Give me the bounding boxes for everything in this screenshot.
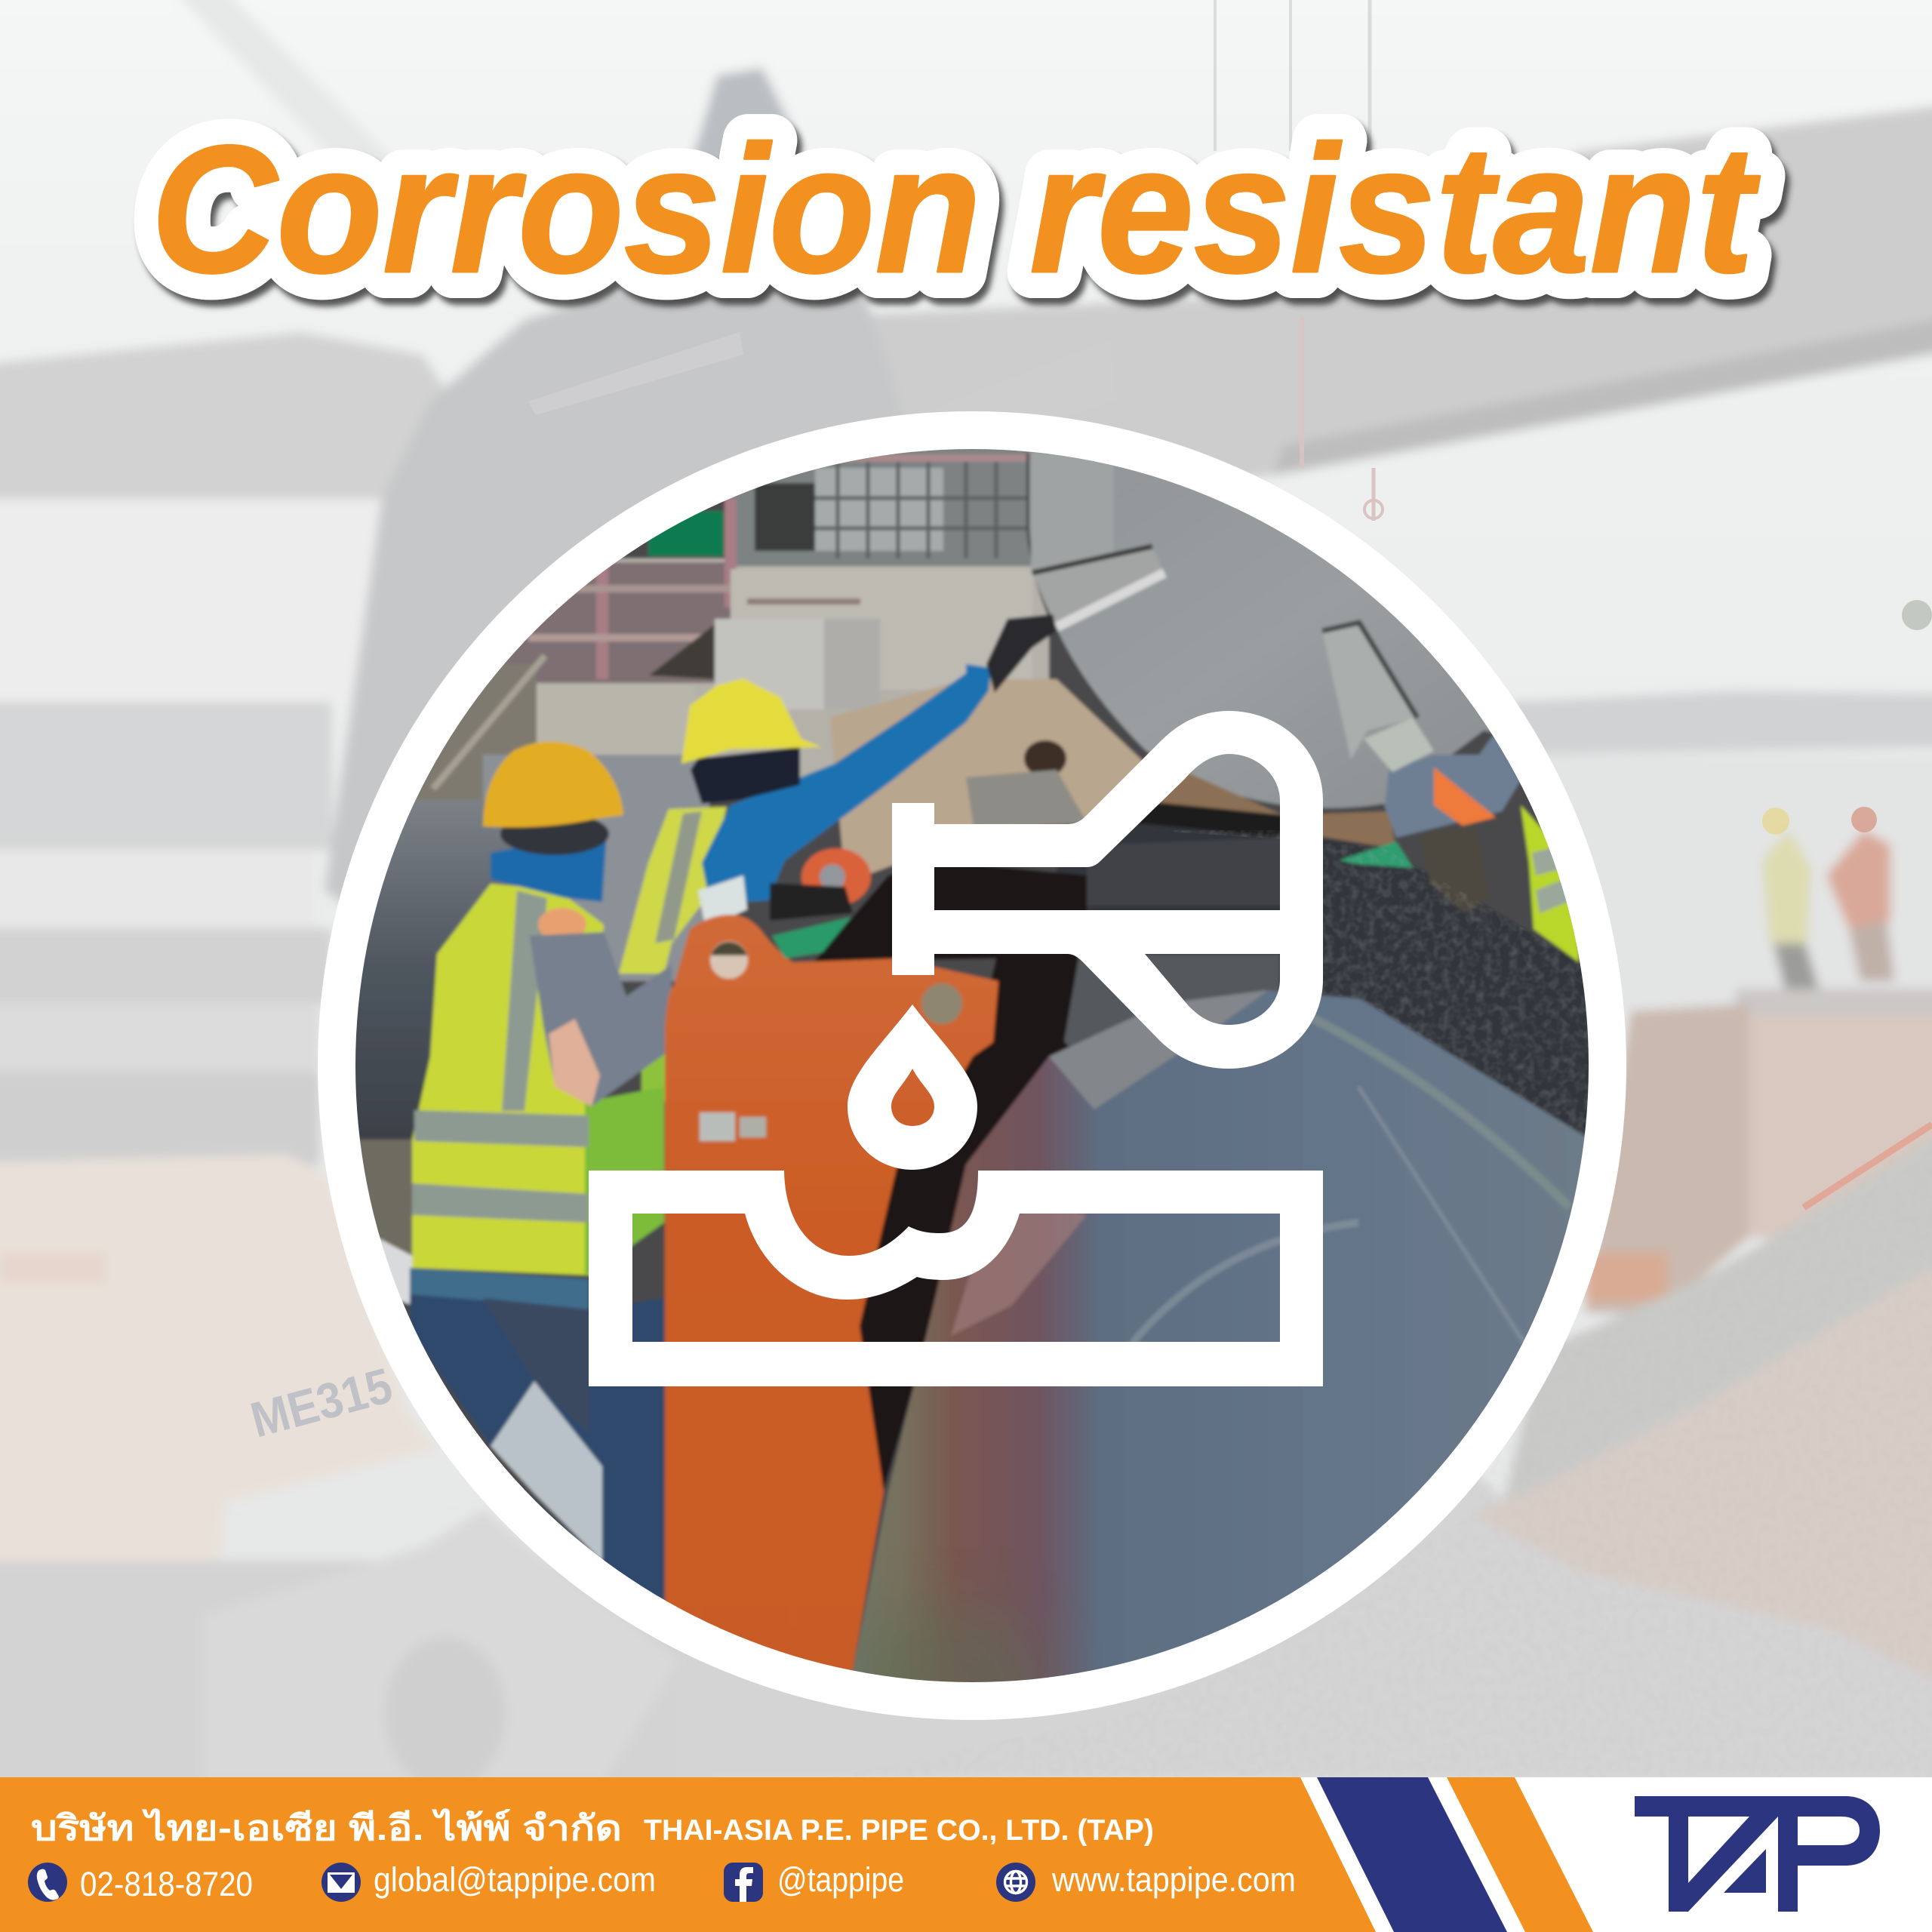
title orange text: Corrosion resistant (151, 108, 1761, 310)
river on right (1509, 755, 1932, 1011)
worker 2 glove (986, 614, 1057, 693)
logo T and P top (1635, 1796, 1880, 1912)
black pipe grain (1148, 830, 1615, 1155)
machinery (1585, 1004, 1749, 1313)
vest stripe lower (412, 1183, 589, 1223)
excavator arm top (679, 68, 800, 196)
worker right orange cuff (1434, 768, 1496, 826)
white bag (491, 1381, 602, 1561)
black pipe band (1132, 800, 1283, 838)
navy stripe (1317, 1777, 1507, 1932)
soil mound (830, 679, 1144, 883)
background wall (536, 555, 1052, 780)
green lower patch (641, 1053, 669, 1102)
background details (528, 0, 1932, 1208)
distant worker yellow (1762, 830, 1811, 943)
debris (1419, 826, 1491, 913)
worker 2 vest stripe (655, 811, 702, 943)
corroded pipe section (589, 1171, 1323, 1386)
plate label small (740, 1117, 766, 1137)
excavator boom (325, 181, 906, 981)
track left edge (204, 1509, 679, 1781)
cream counterweight (0, 1155, 438, 1562)
formwork rail (558, 585, 732, 592)
formwork (475, 562, 732, 683)
gravel texture (830, 1134, 1932, 1777)
formwork rail (528, 634, 724, 641)
silver bar (1057, 573, 1164, 627)
jeans (410, 1294, 664, 1607)
lower left ground (0, 1561, 717, 1787)
small orange ring (801, 848, 871, 906)
black bit (770, 883, 853, 921)
road (483, 755, 709, 981)
worker 1 arm (530, 932, 672, 1106)
gravel road (679, 1434, 1932, 1781)
distant worker red (1826, 830, 1890, 928)
dark strip (649, 623, 717, 679)
formwork post (596, 566, 608, 679)
grey pipe disc (1028, 423, 1592, 810)
plate hole shadow (711, 942, 747, 955)
concrete block (715, 619, 824, 709)
logo A wedge (1724, 1849, 1766, 1893)
icon: facebook (724, 1863, 763, 1902)
worker 1 helmet (483, 741, 623, 827)
phone number: 02-818-8720 (80, 1865, 253, 1903)
worker 1 scarf (491, 830, 607, 902)
orange plate (665, 915, 998, 1690)
bridge centre and right span (800, 102, 1932, 483)
soil dark patch (1024, 740, 1066, 777)
soil grey patch (966, 770, 1087, 826)
title: Corrosion resistant (151, 108, 1761, 310)
platform (1736, 989, 1932, 1015)
footer white base (0, 1777, 1932, 1932)
concrete wall back (731, 569, 1032, 690)
vest stripe vertical (502, 891, 547, 1111)
plate label (700, 1112, 735, 1141)
excavator body (0, 928, 332, 1004)
vest stripe (1532, 845, 1566, 875)
disc rim line (1028, 453, 1384, 810)
ladder rail (433, 656, 545, 789)
excavator band (0, 1004, 320, 1072)
worker 1 vest (412, 884, 604, 1275)
dark opening (755, 483, 815, 551)
vest stripe (1536, 875, 1577, 913)
email address: global@tappipe.com (374, 1860, 656, 1899)
bracket dark line (1032, 546, 1152, 573)
slope grey (1502, 1117, 1932, 1509)
worker right vest (1521, 805, 1579, 962)
footer orange panel (0, 1777, 1376, 1932)
concrete block side (824, 619, 880, 709)
icon: mail (321, 1863, 361, 1902)
distant worker trousers (1774, 943, 1819, 989)
pipe green base (845, 1600, 1041, 1781)
worker right light sleeve (1364, 718, 1434, 772)
worker 2 helmet (681, 678, 822, 764)
scaffold grid (815, 460, 1026, 558)
soil strip right (1132, 755, 1396, 849)
pipe seam (1358, 1087, 1524, 1343)
water drop (848, 1004, 977, 1170)
white cloth (698, 875, 747, 928)
dark pipe left (332, 800, 558, 1147)
faucet (892, 711, 1323, 1069)
white circle ring (318, 411, 1626, 1720)
left water (0, 850, 317, 928)
worker 1 hair (500, 813, 609, 855)
worker 1 skin (549, 1019, 600, 1106)
orange stripe (1447, 1777, 1593, 1932)
icon: globe (996, 1863, 1035, 1902)
grey pipe gap (1064, 954, 1280, 1066)
crane lattice (154, 0, 400, 189)
pipe streak (1132, 1223, 1358, 1343)
bracket wedge (1032, 546, 1164, 627)
second bracket (1322, 623, 1417, 759)
worker 1 shoulder (538, 908, 586, 941)
title white outline: Corrosion resistant (151, 108, 1761, 310)
left bridge (0, 332, 468, 499)
vest stripe upper (414, 1110, 589, 1147)
footer band (0, 1777, 1932, 1932)
left ground lower (332, 1140, 414, 1268)
vest green side (585, 1087, 664, 1275)
track wheel (385, 1638, 506, 1789)
wall rail (747, 598, 860, 605)
left ground (355, 664, 537, 800)
black textured pipe (1057, 817, 1615, 1155)
second bracket edge (1322, 623, 1417, 718)
green panel (648, 511, 724, 556)
scaffold bright (815, 468, 943, 551)
white edge (377, 1238, 414, 1306)
circular photo of workers and pipes (355, 449, 1589, 1682)
low wall (537, 685, 695, 756)
facebook handle: @tappipe (777, 1860, 904, 1899)
machinery base (1585, 1253, 1668, 1302)
formwork pillar (724, 498, 737, 608)
worker 2 vest (619, 807, 727, 974)
excavator lower band (0, 1072, 320, 1166)
plate bolt (921, 983, 962, 1024)
scaffold area (724, 445, 1041, 566)
ring hole (820, 864, 845, 890)
black pipe highlight (1087, 838, 1283, 906)
pale tint (0, 1253, 106, 1283)
bridge lower edge (1274, 313, 1932, 475)
logo diagonal (1688, 1817, 1778, 1912)
left river view (0, 499, 385, 702)
company name English: THAI-ASIA P.E. PIPE CO., LTD. (TAP) (644, 1814, 1154, 1847)
worker right arm (1385, 728, 1521, 838)
worker 2 blue sleeve (702, 664, 991, 904)
pipe streak (1283, 1004, 1570, 1208)
pipe pink highlight (951, 1200, 1087, 1336)
icon: faucet dripping onto corroded pipe (589, 711, 1323, 1386)
green mesh (1339, 841, 1413, 868)
big pipe (849, 990, 1615, 1706)
plate hole (710, 941, 748, 979)
far shore right (1509, 691, 1932, 755)
dark pants shadow (483, 1298, 589, 1434)
website: www.tappipe.com (1051, 1860, 1296, 1899)
TAP logo (1635, 1796, 1880, 1912)
brick block (1749, 1011, 1932, 1238)
dark wedge (814, 860, 1089, 1491)
pipe top highlight (1049, 990, 1268, 1109)
excavator model text: ME315 (245, 1357, 398, 1448)
icon: phone (28, 1863, 67, 1902)
distant worker legs (1849, 921, 1894, 981)
company name Thai: บริษัท ไทย-เอเซีย พี.อี. ไพ้พ์ จำกัด (31, 1808, 622, 1847)
green tag (772, 917, 851, 958)
worker 2 face (691, 747, 800, 804)
slope pink (1472, 1245, 1932, 1698)
disc band (1031, 453, 1114, 574)
shirt hem (410, 1268, 589, 1309)
scaffold top rail (792, 454, 1034, 462)
left far shore (0, 702, 332, 850)
